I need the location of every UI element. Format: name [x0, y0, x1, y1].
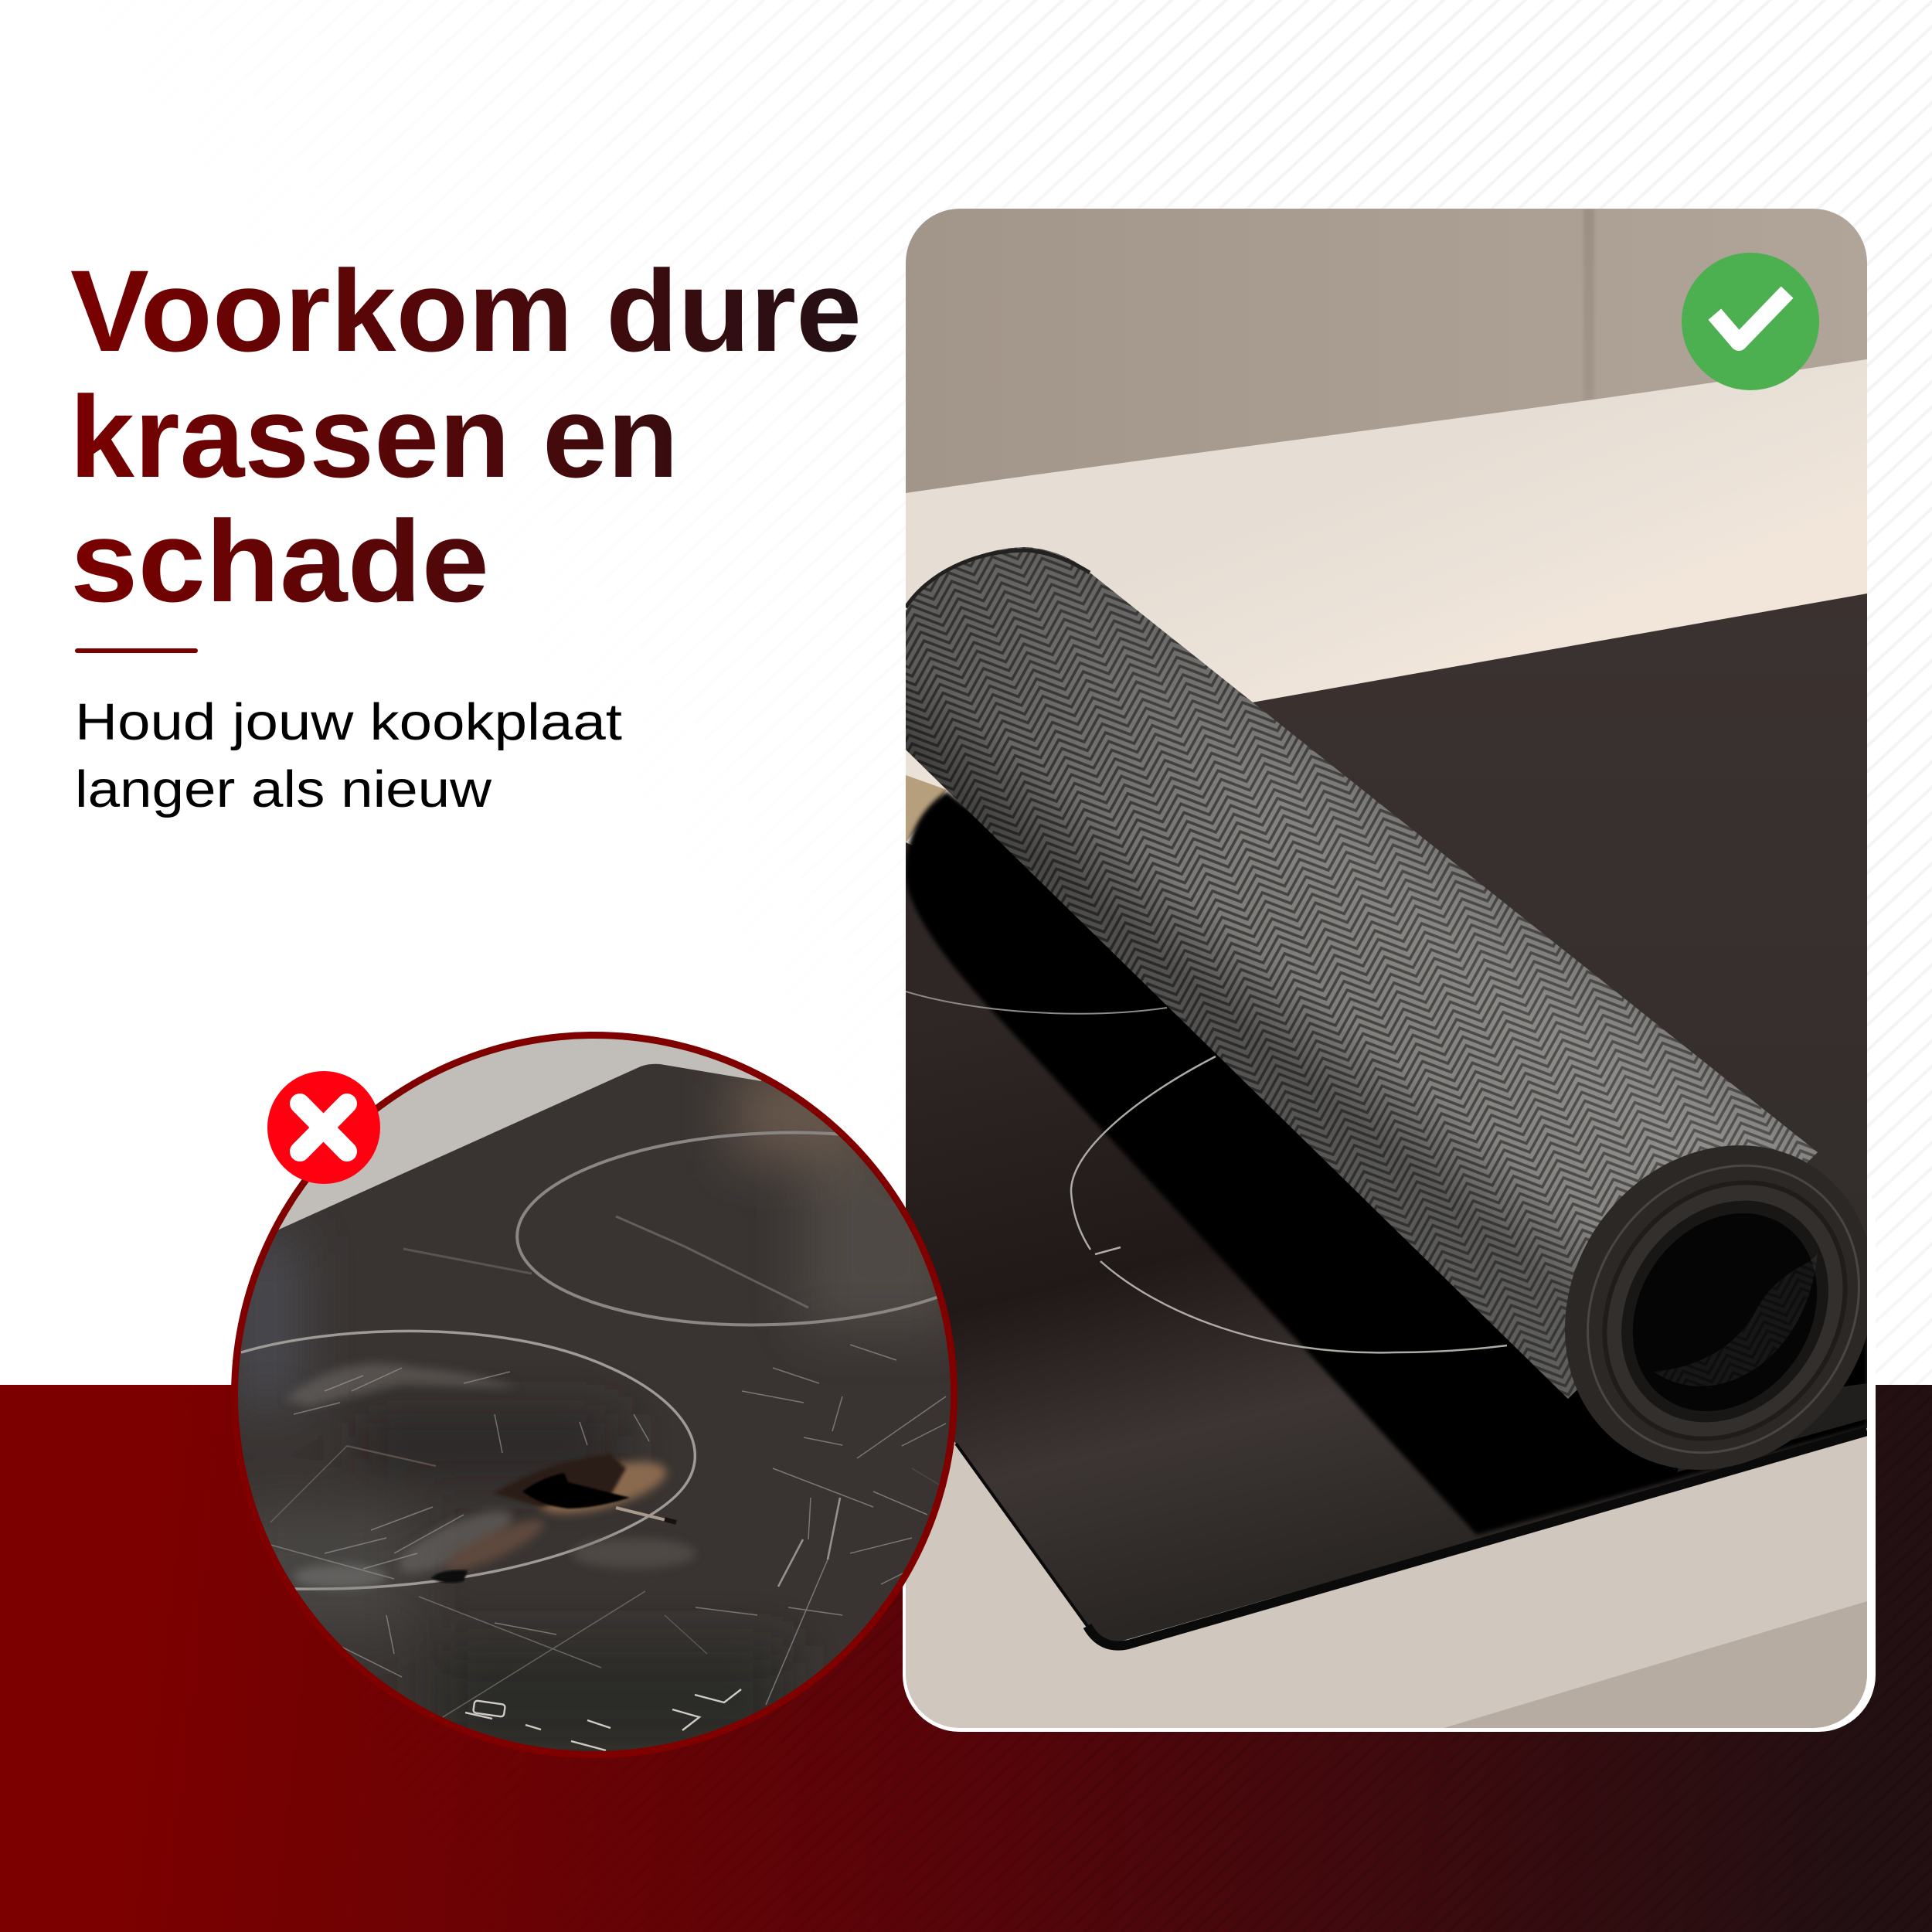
rolled mat end: rings and hole — [1502, 1085, 1932, 1530]
title: Voorkom dure — [70, 246, 862, 376]
hob glass right part — [1252, 594, 1867, 1240]
title — [70, 246, 862, 626]
circle border — [231, 1032, 957, 1758]
counter wedge behind hob — [231, 1005, 761, 1256]
title: krassen en — [70, 372, 679, 502]
reflections on glass — [232, 1066, 958, 1754]
burn halo — [440, 1451, 672, 1580]
panel: solution photo with rolled mat on hob — [906, 209, 1932, 1731]
countertop side face — [1434, 1601, 1867, 1731]
mat bottom flap — [1677, 1383, 1867, 1472]
background: white with faint diagonal stripes — [906, 0, 1932, 1385]
wall — [906, 209, 1867, 518]
hob glass left part with reflection — [906, 842, 1867, 1642]
title: schade — [70, 496, 489, 626]
dark red gradient band — [0, 1385, 1932, 1932]
burner ring upper — [514, 1124, 1032, 1333]
black reflection of the roll — [906, 791, 1867, 1535]
white border of photo — [903, 1159, 1876, 1732]
panel: damaged hob photo in circle — [231, 1005, 1032, 1758]
subtitle: langer als nieuw — [75, 760, 492, 818]
dust smudges — [285, 1363, 696, 1589]
burner ring lower — [232, 1331, 695, 1589]
front burner ring — [1071, 1056, 1507, 1352]
tan reflection on the left — [906, 775, 947, 842]
countertop back — [906, 359, 1867, 850]
icon: green check badge — [1682, 253, 1819, 390]
hob control markings — [465, 1689, 741, 1750]
title underline — [75, 648, 198, 653]
burn holes — [431, 1473, 676, 1583]
scratched hob scene — [231, 1005, 1032, 1758]
subtitle — [75, 693, 622, 818]
rolled mat body with herringbone — [906, 547, 1818, 1399]
back burner ring — [906, 992, 1167, 1014]
icon: red cross badge — [267, 1071, 380, 1184]
scratches — [270, 1216, 951, 1717]
hob front and side edges — [956, 1431, 1867, 1646]
countertop front — [906, 1428, 1867, 1728]
subtitle: Houd jouw kookplaat — [75, 693, 622, 751]
